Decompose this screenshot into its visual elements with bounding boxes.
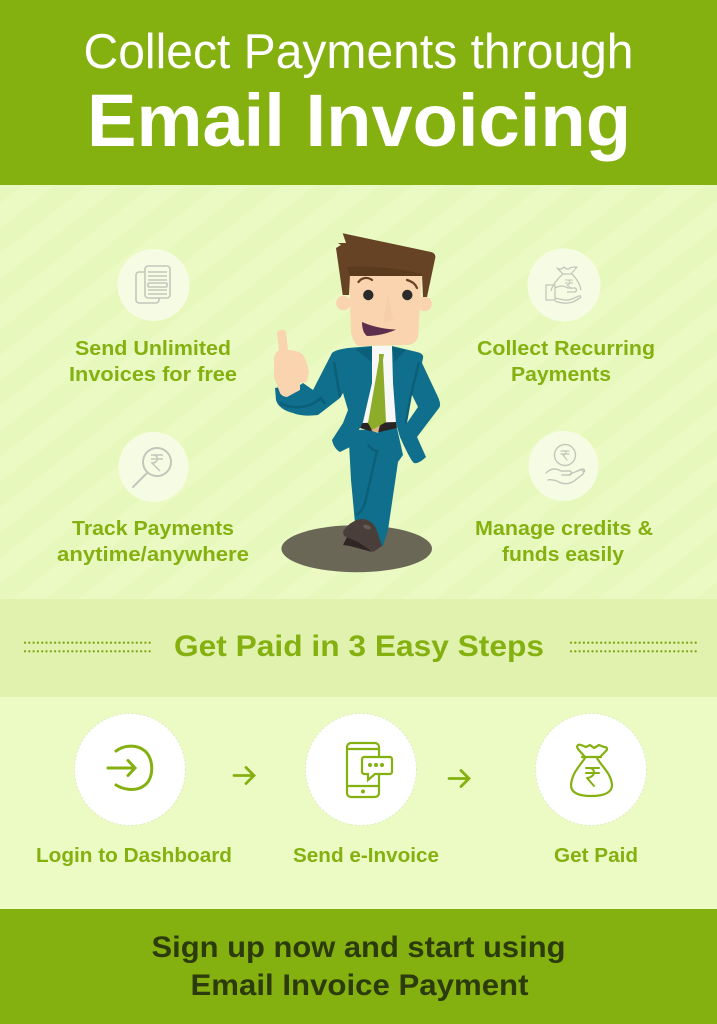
feature label: Invoices for free <box>69 363 237 386</box>
call to action: Sign up now and start using <box>152 931 566 964</box>
icon: money bag <box>536 714 646 826</box>
feature label: funds easily <box>502 543 625 566</box>
feature label: anytime/anywhere <box>57 543 249 566</box>
steps panel background <box>0 697 717 909</box>
arrow <box>234 768 254 784</box>
title line 1: Collect Payments through <box>84 25 634 79</box>
jacket lapel shading <box>406 362 419 423</box>
shoe sole <box>343 537 372 552</box>
icon: documents <box>118 249 190 321</box>
feature label: Track Payments <box>72 517 234 540</box>
feature: recurring payments <box>477 248 655 386</box>
belt <box>360 422 397 432</box>
steps heading band <box>0 599 717 697</box>
step 3: get paid <box>536 714 646 867</box>
feature label: Manage credits & <box>475 517 653 540</box>
shoe <box>343 519 382 552</box>
jacket right panel and arm <box>392 346 440 463</box>
jacket shading <box>280 362 340 407</box>
mouth <box>362 322 396 336</box>
step 1: login <box>36 714 232 867</box>
mascot: businessman giving thumbs up <box>274 233 440 572</box>
shirt <box>362 346 398 425</box>
hand <box>274 330 309 397</box>
features panel background <box>0 185 717 599</box>
waist gap <box>407 395 418 423</box>
call to action: Email Invoice Payment <box>190 969 529 1002</box>
feature: manage credits <box>475 431 653 566</box>
eyebrows <box>358 278 417 288</box>
icon: money bag in hand <box>528 248 600 322</box>
step 2: send e-invoice <box>293 714 439 867</box>
icon: login circle <box>74 714 186 826</box>
feature label: Collect Recurring <box>477 337 655 360</box>
dotted rule left <box>25 643 152 651</box>
trouser fold <box>356 445 377 515</box>
ears <box>336 296 351 310</box>
hair <box>336 233 435 297</box>
footer band <box>0 909 717 1024</box>
step label: Send e-Invoice <box>293 845 439 867</box>
icon: phone with chat bubble <box>306 714 416 826</box>
feature label: Send Unlimited <box>75 337 231 360</box>
feature label: Payments <box>511 363 611 386</box>
jacket left panel and arm <box>275 346 372 452</box>
feature: send invoices <box>69 249 237 386</box>
arrow <box>449 770 469 786</box>
shadow <box>281 525 432 572</box>
dotted rule right <box>571 643 698 651</box>
icon: coin over hand <box>528 431 598 501</box>
step label: Login to Dashboard <box>36 845 232 867</box>
tie <box>368 354 386 430</box>
section heading: Get Paid in 3 Easy Steps <box>174 630 544 663</box>
nose <box>383 293 393 323</box>
buckle <box>370 425 380 433</box>
face <box>349 272 422 346</box>
icon: magnifier with rupee <box>118 432 188 502</box>
step label: Get Paid <box>554 845 638 867</box>
title line 2: Email Invoicing <box>87 79 631 162</box>
feature: track payments <box>57 432 249 566</box>
header band <box>0 0 717 185</box>
eyes <box>363 290 412 300</box>
trousers <box>349 428 403 546</box>
